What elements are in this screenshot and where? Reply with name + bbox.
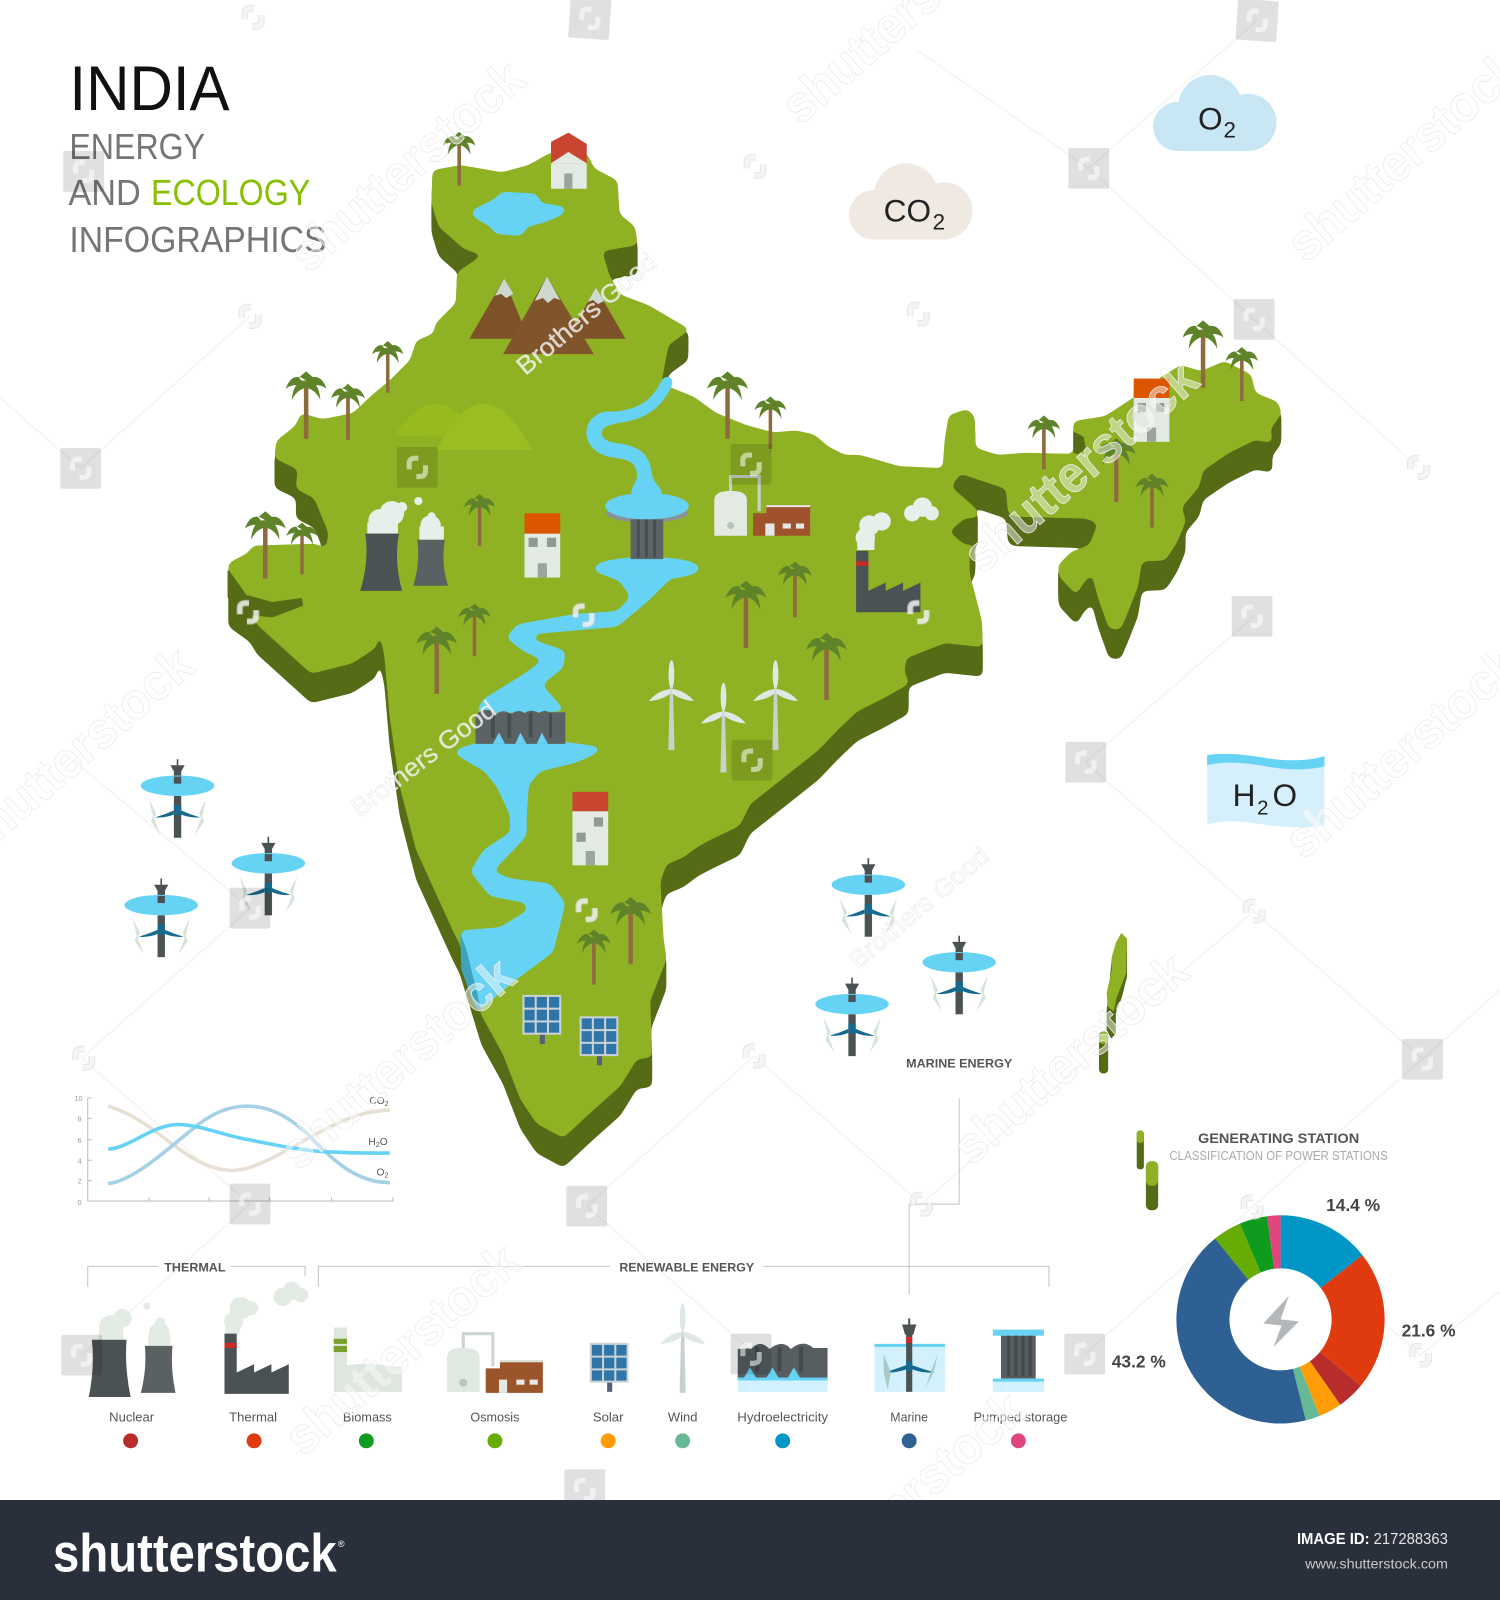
watermark brothers good text: Brothers Good [511, 248, 662, 381]
chart axis labels: 6 [78, 1137, 82, 1145]
chart axis labels: 10 [75, 1095, 83, 1103]
upper river flare [629, 480, 665, 496]
watermark shutterstock text: shutterstock [268, 946, 526, 1180]
subtitle: ecology: ECOLOGY [151, 173, 310, 213]
solar panels [522, 995, 618, 1065]
lower dam [476, 710, 565, 744]
icon: pumped storage [993, 1330, 1044, 1392]
source labels: Biomass [343, 1409, 392, 1424]
footer url: www.shutterstock.com [1304, 1556, 1448, 1572]
CO2 cloud: CO [884, 192, 931, 228]
icon: osmosis [447, 1334, 543, 1393]
donut percentages [1112, 1195, 1456, 1371]
marine energy connector: MARINE ENERGY [906, 1056, 1012, 1070]
map extruded side [229, 157, 1282, 1167]
H2O panel: H [1233, 777, 1255, 813]
CO2 cloud: 2 [933, 210, 945, 235]
icon: biomass [334, 1328, 402, 1392]
thermal bracket: THERMAL [164, 1260, 226, 1274]
osmosis plant [714, 477, 810, 536]
upper river mouth [607, 382, 667, 418]
title block [68, 54, 327, 260]
footer registered mark: ® [338, 1539, 345, 1549]
renewable bracket [318, 1260, 1049, 1287]
source labels: Thermal [229, 1409, 277, 1424]
CO2 cloud [849, 163, 972, 239]
chart axes [88, 1098, 393, 1201]
icon: marine [874, 1318, 945, 1392]
icon: wind [660, 1303, 705, 1393]
islands [1099, 934, 1158, 1210]
thermal bracket [88, 1260, 305, 1287]
legend dots [123, 1433, 1026, 1448]
line chart [75, 1095, 393, 1207]
subtitle: and: AND [68, 173, 141, 213]
north lake [470, 192, 566, 236]
map top surface [229, 153, 1282, 1138]
source labels: Solar [593, 1409, 624, 1424]
watermark shutterstock text: shutterstock [278, 48, 536, 282]
curve labels: H [368, 1137, 376, 1148]
chart axis labels: 4 [78, 1157, 82, 1165]
nuclear plant [360, 497, 448, 591]
icon: solar [590, 1343, 629, 1392]
mountains [469, 277, 626, 354]
chart axis labels [75, 1095, 83, 1207]
O2 cloud: O [1198, 101, 1223, 137]
source labels: Pumped storage [973, 1409, 1067, 1424]
subtitle: energy: ENERGY [69, 127, 205, 167]
icon: lightning bolt [1263, 1296, 1299, 1347]
map of India [229, 132, 1282, 1167]
footer logo: shutterstock [53, 1523, 338, 1583]
source labels: Hydroelectricity [737, 1409, 828, 1424]
donut percentages: 21.6 % [1402, 1321, 1456, 1341]
marine turbines east [815, 858, 996, 1056]
north east house [1134, 379, 1169, 442]
upper dam [605, 493, 689, 559]
watermark shutterstock text: shutterstock [942, 941, 1199, 1175]
factory with smoke [856, 497, 939, 612]
south house [572, 792, 608, 865]
marine turbines west [124, 759, 305, 957]
middle river [476, 571, 694, 713]
watermark brothers good text [346, 248, 995, 975]
chart axis labels: 8 [78, 1115, 82, 1123]
footer bar [0, 1500, 1500, 1600]
donut heading: CLASSIFICATION OF POWER STATIONS [1169, 1148, 1388, 1163]
H2O panel [1207, 754, 1324, 827]
source labels: Marine [890, 1409, 928, 1424]
gulf shadow [229, 571, 302, 616]
O2 cloud [1153, 75, 1277, 151]
O2 cloud: 2 [1223, 117, 1236, 142]
curve labels: 2 [384, 1172, 388, 1180]
donut percentages: 43.2 % [1112, 1351, 1166, 1371]
donut percentages: 14.4 % [1326, 1195, 1380, 1215]
H2O curve [108, 1124, 390, 1153]
upper river [593, 418, 647, 500]
chart axis labels: 2 [78, 1178, 82, 1186]
source labels [109, 1409, 1067, 1424]
H2O panel: O [1272, 777, 1297, 813]
watermark shutterstock text: shutterstock [273, 1232, 531, 1466]
curve labels: O [380, 1137, 388, 1148]
renewable bracket: RENEWABLE ENERGY [619, 1260, 754, 1274]
delta shade [460, 934, 482, 1012]
O2 curve [108, 1106, 390, 1184]
subtitle: infographics: INFOGRAPHICS [69, 220, 327, 260]
rivers and lakes [455, 192, 700, 1011]
watermark brothers good text: Brothers Good [844, 842, 995, 975]
watermark small marks [76, 8, 1429, 1364]
donut heading: GENERATING STATION [1198, 1131, 1359, 1147]
curve labels: 2 [385, 1100, 389, 1108]
lower river and delta [455, 742, 600, 1011]
north east shadow [1073, 432, 1086, 454]
icon: hydroelectricity [738, 1344, 828, 1392]
middle lake [594, 557, 700, 580]
chart axis labels: 0 [78, 1199, 82, 1207]
donut heading [1169, 1131, 1388, 1163]
source labels: Osmosis [470, 1409, 520, 1424]
icon: nuclear [89, 1303, 176, 1397]
curve labels: O [377, 1168, 384, 1179]
wind turbines [649, 660, 798, 772]
palm trees [245, 132, 1258, 985]
watermark brothers good text: Brothers Good [346, 696, 501, 822]
hills [395, 404, 533, 450]
H2O panel: 2 [1257, 797, 1268, 819]
source labels: Wind [668, 1409, 697, 1424]
donut chart [1176, 1215, 1385, 1424]
curve labels: CO [369, 1096, 385, 1107]
icon: thermal [224, 1282, 308, 1394]
CO2 curve [108, 1106, 390, 1170]
source labels: Nuclear [109, 1409, 155, 1424]
central house [524, 513, 560, 578]
footer image id: IMAGE ID: 217288363 [1297, 1531, 1448, 1548]
watermark shutterstock text: shutterstock [952, 349, 1209, 583]
curve labels [368, 1096, 389, 1180]
title: India: INDIA [69, 54, 230, 124]
marine energy connector [906, 1056, 1012, 1295]
north house [551, 133, 587, 189]
curve labels: 2 [376, 1141, 380, 1149]
